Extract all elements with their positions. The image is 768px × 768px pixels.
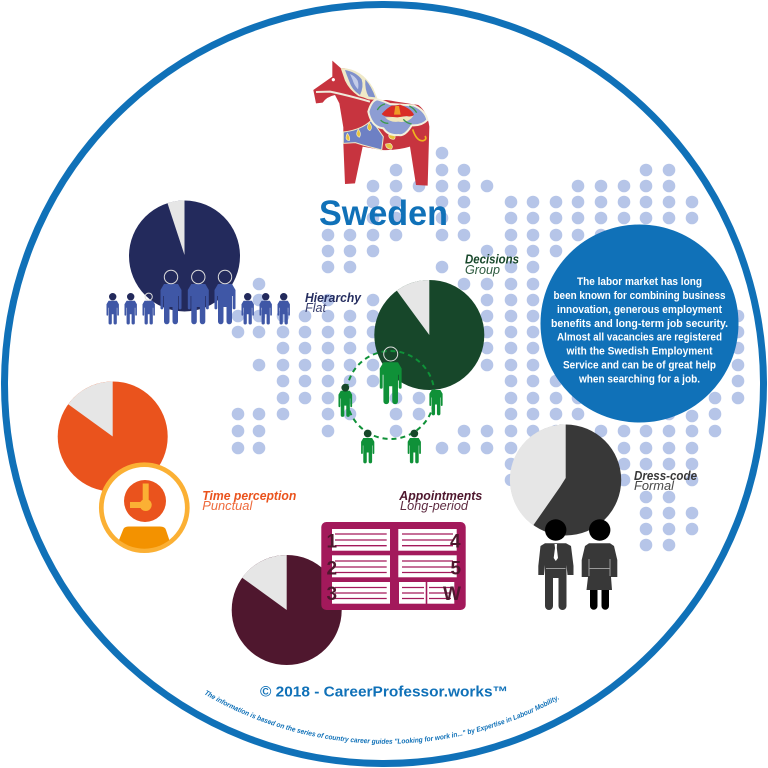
panel: hierarchy [107,200,362,324]
panel: appointments [232,488,482,665]
label: decisions: Group [465,262,500,277]
footer: curved source note: The information is based on the series of country career guides "Looking for work in..." by Expertise in Labour Mobility. [205,690,559,745]
label: appointments [398,488,482,513]
icon: calendar: 5 [450,558,462,579]
callout: labor market summary: been known for combining business [554,290,726,302]
icon: hierarchy people [107,270,290,324]
dotted map of Sweden [238,153,738,545]
panel: time perception [58,382,296,560]
label: appointments: Long-period [400,498,469,513]
callout: labor market summary: with the Swedish Employment [566,346,713,358]
icon: calendar: W [443,584,461,605]
callout: labor market summary: innovation, generous employment [557,304,722,316]
pie chart: dress code [510,424,621,536]
label: decisions: Decisions [465,251,519,266]
label: time perception: Punctual [202,498,253,513]
callout: labor market summary: Almost all vacancies are registered [557,332,722,344]
panel: dress code [510,424,697,610]
title: Sweden [319,194,448,233]
panel: decisions [338,251,519,463]
label: dress code: Formal [634,478,675,493]
label: time perception: Time perception [202,488,296,503]
icon: calendar: 1 [326,532,338,553]
icon: calendar [321,522,466,610]
label: hierarchy [305,290,362,315]
icon: woman in suit [582,519,617,610]
callout: labor market summary: Service and can be of great help [563,360,716,372]
label: decisions [465,251,519,277]
label: dress code: Dress-code [634,468,697,483]
icon: man in suit [538,519,574,610]
icon: clock and person [101,465,187,560]
pie chart: decisions [374,280,484,390]
label: appointments: Appointments [398,488,482,503]
footer: copyright: © 2018 - CareerProfessor.works™ [260,685,508,701]
pie chart: appointments [232,555,342,665]
callout: labor market summary: when searching for a job. [578,374,700,386]
label: time perception [202,488,296,513]
icon: Dala horse [313,61,429,186]
icon: group of people [338,347,443,463]
callout: labor market summary: The labor market has long [577,276,702,288]
label: hierarchy: Hierarchy [305,290,362,305]
callout: labor market summary: benefits and long-term job security. [551,318,728,330]
icon: calendar: 2 [326,558,337,579]
label: hierarchy: Flat [305,300,327,315]
pie chart: time perception [58,382,168,492]
icon: calendar: 4 [450,532,461,553]
icon: calendar: 3 [326,584,337,605]
pie chart: hierarchy [129,200,240,312]
callout: labor market summary [540,224,738,422]
label: dress code [634,468,697,493]
